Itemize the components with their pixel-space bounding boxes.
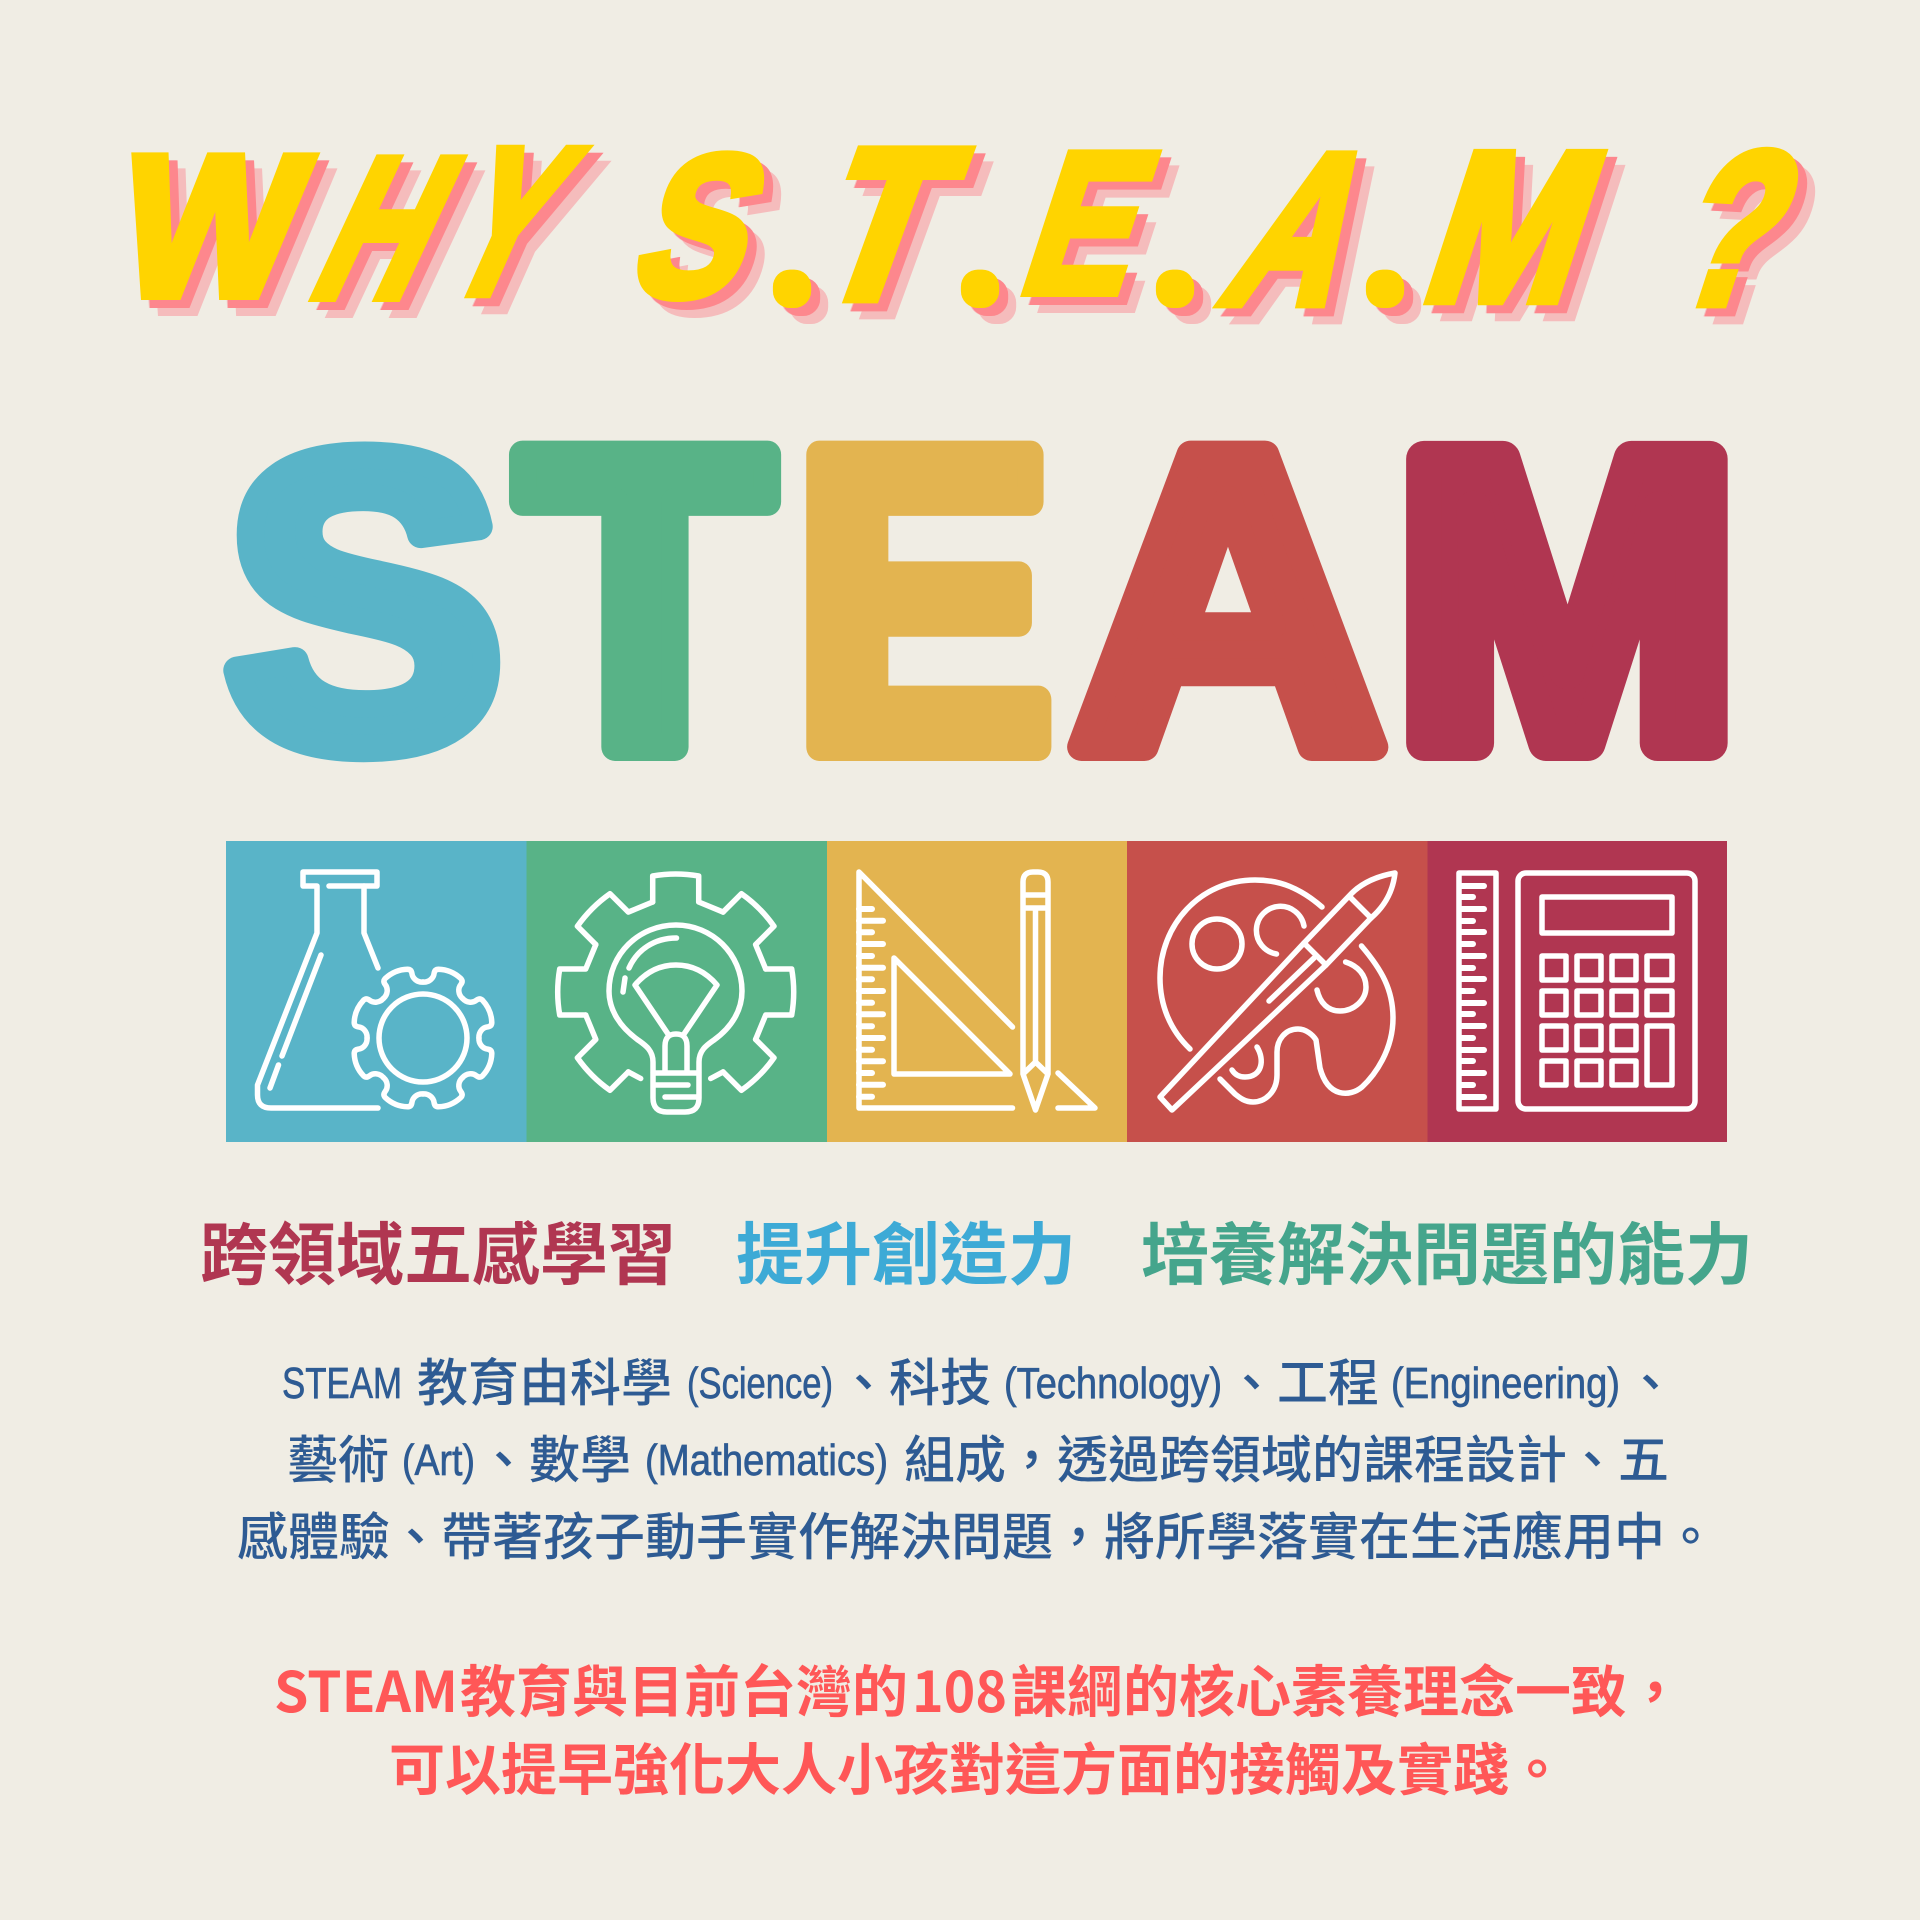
title: WHY S.T.E.A.M ?: E	[1001, 111, 1180, 335]
closing statement in red: STEAM	[274, 1648, 458, 1729]
tile: technology gear and light bulb	[526, 841, 827, 1142]
description paragraph: (Technology)	[1004, 1359, 1222, 1408]
tile: engineering set squares and pencil	[827, 841, 1128, 1142]
tile: science flask and gear	[226, 841, 526, 1142]
title: WHY S.T.E.A.M ?: .	[788, 265, 796, 298]
description paragraph: 、科技	[838, 1342, 991, 1416]
description paragraph: 、數學	[478, 1419, 631, 1493]
title: WHY S.T.E.A.M ?: Y	[414, 104, 609, 337]
title: WHY S.T.E.A.M ?: T	[788, 106, 989, 344]
closing statement in red: 教育與目前台灣的	[460, 1648, 908, 1729]
description paragraph: 感體驗、帶著孩子動手實作解決問題，將所學落實在生活應用中。	[237, 1496, 1716, 1570]
title: WHY S.T.E.A.M ?: .	[976, 265, 984, 298]
title: WHY S.T.E.A.M ?: S	[612, 114, 793, 338]
title: WHY S.T.E.A.M ?: W	[104, 115, 321, 338]
description paragraph: (Engineering)	[1391, 1359, 1620, 1408]
headline: cross-disciplinary learning: 跨領域五感學習	[200, 1218, 676, 1294]
description paragraph: 教育由科學	[417, 1342, 672, 1416]
title: WHY S.T.E.A.M ?: M	[1402, 109, 1629, 345]
closing statement in red: 108	[912, 1648, 1007, 1729]
description paragraph: STEAM	[282, 1359, 402, 1408]
description paragraph: (Art)	[402, 1436, 475, 1485]
headline: creativity: 提升創造力	[736, 1218, 1076, 1294]
title: WHY S.T.E.A.M ?: A	[1194, 110, 1416, 349]
title: WHY S.T.E.A.M ?: .	[1381, 265, 1389, 298]
title: WHY S.T.E.A.M ?: .	[1171, 265, 1179, 298]
description paragraph	[237, 1342, 1716, 1570]
title: WHY S.T.E.A.M ?	[104, 104, 1828, 349]
tile: art palette and brush	[1127, 841, 1428, 1142]
title: WHY S.T.E.A.M ?: ?	[1652, 107, 1828, 349]
closing statement in red: 課綱的核心素養理念一致，	[1011, 1648, 1683, 1729]
description paragraph: 組成，透過跨領域的課程設計、五	[904, 1419, 1669, 1493]
closing statement in red: 可以提早強化大人小孩對這方面的接觸及實踐。	[389, 1726, 1565, 1807]
description paragraph: 、工程	[1226, 1342, 1379, 1416]
description paragraph: (Science)	[687, 1359, 833, 1408]
description paragraph: (Mathematics)	[645, 1436, 888, 1485]
description paragraph: 、	[1625, 1342, 1676, 1416]
tile: mathematics ruler and calculator	[1428, 841, 1727, 1142]
description paragraph: 藝術	[287, 1419, 389, 1493]
title: WHY S.T.E.A.M ?: H	[284, 117, 492, 340]
closing statement in red	[274, 1648, 1683, 1807]
STEAM logo wordmark	[223, 362, 1737, 800]
headline: problem solving: 培養解決問題的能力	[1141, 1218, 1753, 1294]
